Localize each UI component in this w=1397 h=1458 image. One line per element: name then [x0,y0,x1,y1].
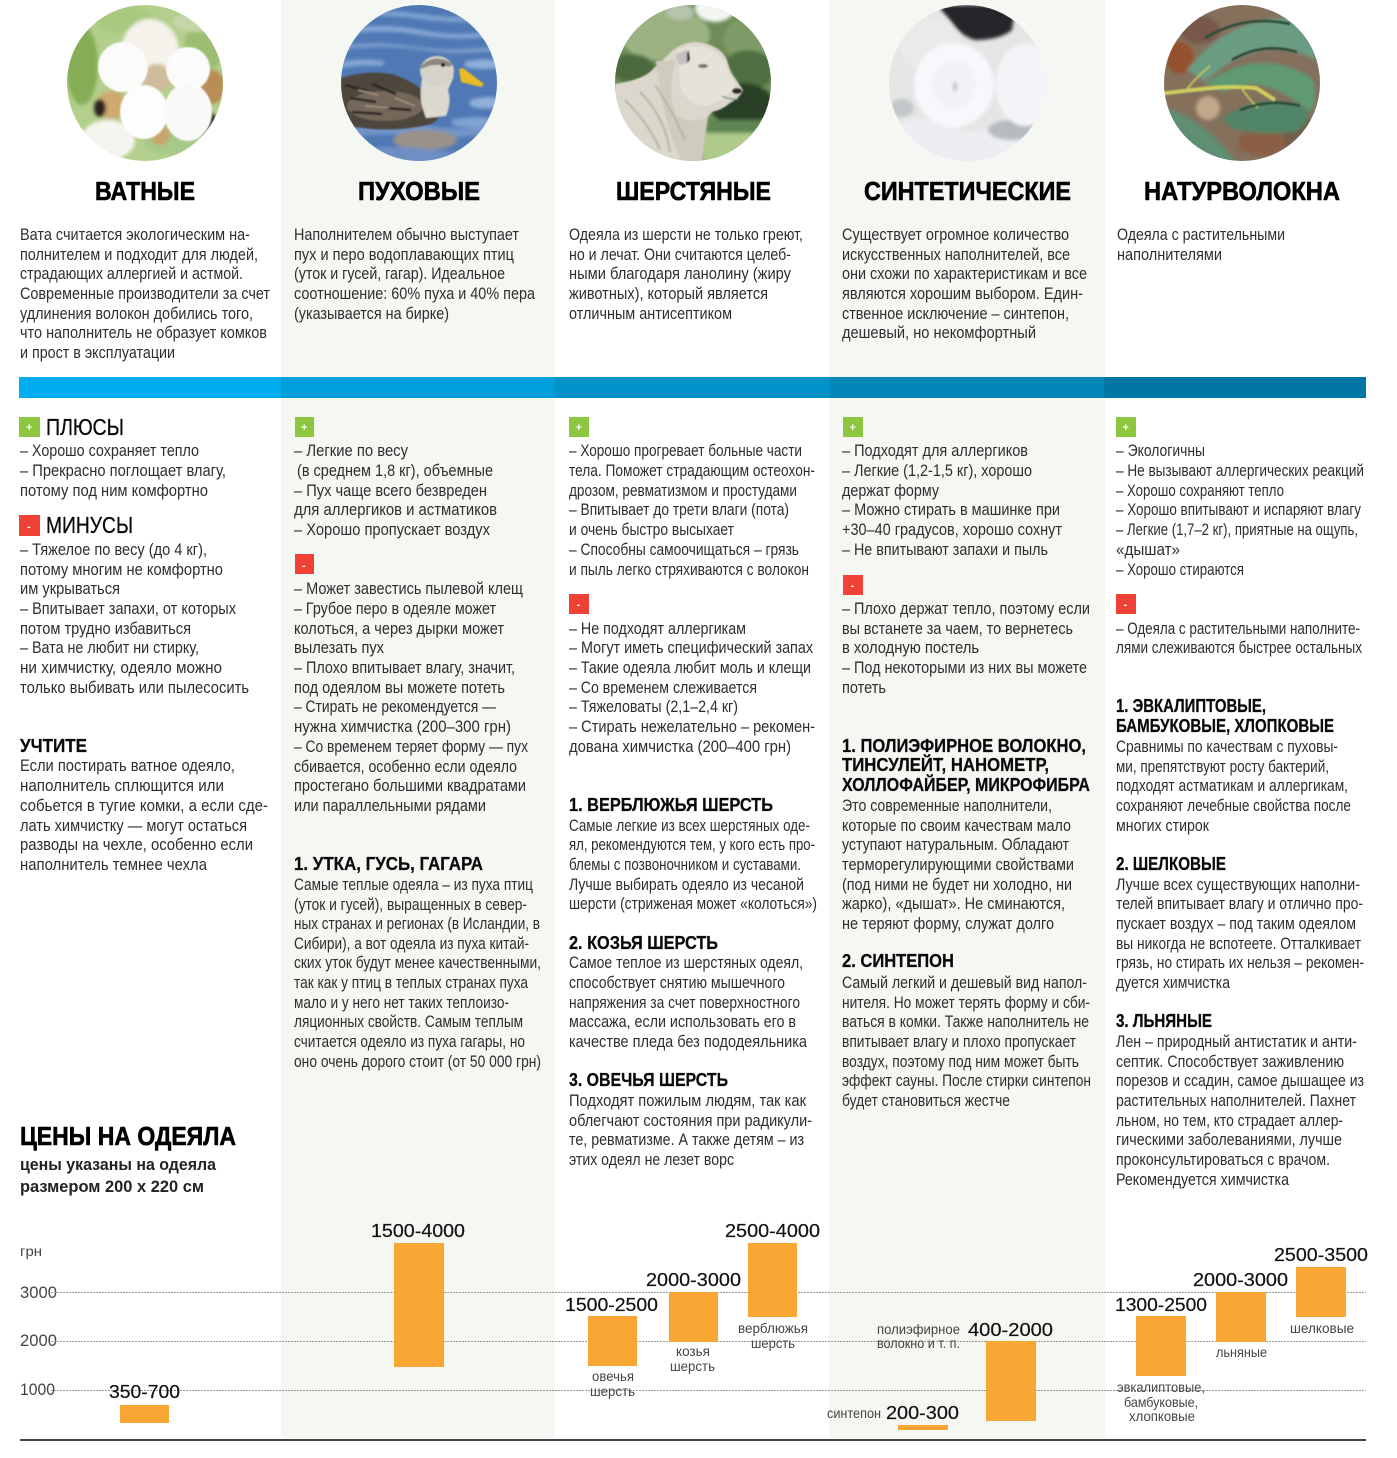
icon: duck photo [341,5,505,164]
intro text: удлинения волокон добились того, [20,305,253,323]
heading: ПУХОВЫЕ: ПУХОВЫЕ [358,178,480,206]
plus badge [1116,417,1136,437]
intro text: страдающих аллергией и астмой. [20,265,243,283]
type: duck, goose, loon: ских уток будут менее качественными, [294,954,541,972]
intro text [1117,226,1285,264]
type: polyester fibre: ХОЛЛОФАЙБЕР, МИКРОФИБРА [842,774,1090,795]
type: duck, goose, loon: считается одеяло из пуха гагары, но [294,1033,525,1051]
type: linen: растительных наполнителей. Пахнет [1116,1092,1356,1110]
type: silk: пускает воздух – под таким одеялом [1116,915,1356,933]
type: goat wool: способствует снятию мышечного [569,974,785,992]
type: linen: септик. Способствует заживлению [1116,1053,1344,1071]
note: УЧТИТЕ: наполнитель сплющится или [20,777,224,795]
intro text: ными благодаря ланолину (жиру [569,265,792,283]
pros list: – Легкие (1,2-1,5 кг), хорошо [842,462,1032,480]
blue divider band [19,377,1366,398]
pros list: (в среднем 1,8 кг), объемные [297,462,493,480]
intro text: что наполнитель не образует комков [20,324,267,342]
note: УЧТИТЕ [20,736,268,874]
cons list: под одеялом вы можете потеть [294,679,505,697]
type: sheep wool: те, ревматизме. А также детям – из [569,1131,804,1149]
minus badge and label: МИНУСЫ [46,512,133,538]
type: silk: телей впитывает влагу и отлично про- [1116,895,1363,913]
intro text: Одеяла с растительными [1117,226,1285,244]
pros list: – Хорошо прогревает больные части [569,442,802,460]
minus badge: - [576,599,580,611]
minus badge and label: - [27,521,31,533]
minus badge [295,554,314,574]
bar: sheep wool 1500-2500: шерсть [590,1383,635,1399]
bar: down 1500-4000: 1500-4000 [371,1220,465,1241]
type: silk: 2. ШЕЛКОВЫЕ [1116,854,1226,874]
type: camel wool: ял, рекомендуются тем, у кого есть про- [569,836,815,854]
intro text: пух и перо водоплавающих птиц [294,246,514,264]
type: linen: Лен – природный антистатик и анти- [1116,1033,1357,1051]
type: polyester fibre [842,736,1090,933]
type: goat wool: Самое теплое из шерстяных одеял, [569,954,803,972]
icon: cotton photo [66,5,225,161]
cons list: – Под некоторыми из них вы можете [842,659,1087,677]
plus badge and label [19,414,124,440]
cons list: потом трудно избавиться [20,620,191,638]
minus badge: - [1124,599,1128,611]
chart title: ЦЕНЫ НА ОДЕЯЛА [20,1123,236,1151]
intro text [569,226,803,323]
type: camel wool: блемы с позвоночником и суставами. [569,856,801,874]
type: sintepon: впитывает влагу и плохо пропускает [842,1033,1076,1051]
bar: silk 2500-3500: шелковые [1290,1320,1354,1336]
minus badge [843,575,863,595]
intro text: (уток и гусей, гагар). Идеальное [294,265,505,283]
type: goat wool: качестве пледа без пододеяльника [569,1033,808,1051]
heading: СИНТЕТИЧЕСКИЕ: СИНТЕТИЧЕСКИЕ [864,178,1071,206]
intro text: животных), который является [569,285,768,303]
pros list: потому под ним комфортно [20,482,208,500]
cons list: – Могут иметь специфический запах [569,639,813,657]
bar: camel wool 2500-4000 [725,1220,820,1351]
type: polyester fibre: которые по своим качествам мало [842,817,1071,835]
pros list: и очень быстро высыхает [569,521,734,539]
plus badge: + [850,422,856,434]
pros list: – Подходят для аллергиков [842,442,1028,460]
type: sheep wool: 3. ОВЕЧЬЯ ШЕРСТЬ [569,1070,728,1090]
pros list [842,442,1062,559]
type: polyester fibre: уступают натуральным. Обладают [842,836,1069,854]
type: eucalyptus, bamboo, cotton: многих стирок [1116,817,1210,835]
type: goat wool: 2. КОЗЬЯ ШЕРСТЬ [569,933,718,953]
minus badge [1116,594,1136,614]
type: eucalyptus, bamboo, cotton: БАМБУКОВЫЕ, ХЛОПКОВЫЕ [1116,716,1334,736]
note: УЧТИТЕ: разводы на чехле, особенно если [20,836,253,854]
type: eucalyptus, bamboo, cotton: ми, препятствуют росту бактерий, [1116,758,1329,776]
intro text: Современные производители за счет [20,285,270,303]
intro text: они схожи по характеристикам и все [842,265,1087,283]
plus badge and label: ПЛЮСЫ [46,414,124,440]
bar: sheep wool 1500-2500: овечья [592,1368,634,1384]
intro text: Вата считается экологическим на- [20,226,250,244]
cons list: – Не подходят аллергикам [569,620,746,638]
type: goat wool: массажа, если использовать его в [569,1013,796,1031]
cons list [569,620,815,756]
column 2: down blankets [294,5,541,1071]
type: sheep wool: облегчают состояния при радикули- [569,1112,812,1130]
pros list: – Хорошо стираются [1116,561,1244,579]
intro text [20,226,270,362]
pros list: – Пух чаще всего безвреден [294,482,487,500]
plus badge: + [576,422,582,434]
type: goat wool [569,933,808,1051]
type: camel wool [569,795,817,913]
bar: linen 2000-3000: 2000-3000 [1193,1269,1288,1290]
pros list: дрозом, ревматизмом и простудами [569,482,797,500]
intro text: Одеяла из шерсти не только греют, [569,226,803,244]
bar: linen 2000-3000 [1193,1269,1288,1360]
intro text: наполнителями [1117,246,1222,264]
plus badge and label: + [26,422,32,434]
cons list: – Такие одеяла любит моль и клещи [569,659,811,677]
type: duck, goose, loon: Сибири), а вот одеяла из пуха китай- [294,935,529,953]
type: camel wool: Самые легкие из всех шерстяных оде- [569,817,810,835]
column 3: wool blankets [569,0,817,1169]
chart title [20,1123,236,1196]
type: camel wool: шерсти (стриженая может «колоться») [569,895,817,913]
type: camel wool: Лучше выбирать одеяло из чесаной [569,876,804,894]
type: duck, goose, loon: Самые теплые одеяла – из пуха птиц [294,876,533,894]
type: eucalyptus, bamboo, cotton: сохраняют лечебные свойства после [1116,797,1351,815]
cons list: сбивается, особенно если одеяло [294,758,517,776]
intro text: дешевый, но некомфортный [842,324,1036,342]
cons list: простегано большими квадратами [294,777,526,795]
pros list: – Не впитывают запахи и пыль [842,541,1048,559]
cons list [294,580,528,815]
plus badge [569,417,589,437]
type: sintepon: ваться в комки. Также наполнитель не [842,1013,1089,1031]
pros list: тела. Поможет страдающим остеохон- [569,462,815,480]
note: УЧТИТЕ: Если постирать ватное одеяло, [20,757,235,775]
type: eucalyptus, bamboo, cotton: 1. ЭВКАЛИПТОВЫЕ, [1116,696,1266,716]
axis labels: 1000 [20,1380,55,1399]
bar: polyester 400-2000: волокно и т. п. [877,1335,960,1351]
column 4: synthetic blankets [842,5,1091,1110]
type: sintepon: эффект сауны. После стирки синтепон [842,1072,1091,1090]
column 5: natural fibre blankets [1116,5,1364,1189]
bar: cotton 350-700: 350-700 [109,1381,180,1402]
intro text: соотношение: 60% пуха и 40% пера [294,285,536,303]
intro text: являются хорошим выбором. Един- [842,285,1083,303]
cons list: нужна химчистка (200–300 грн) [294,718,511,736]
icon: eucalyptus photo [1159,5,1320,162]
minus badge: - [302,560,306,572]
pros list: – Можно стирать в машинке при [842,501,1060,519]
pros list: – Впитывает до трети влаги (пота) [569,501,789,519]
bar: sintepon 200-300: синтепон [827,1405,881,1421]
type: polyester fibre: 1. ПОЛИЭФИРНОЕ ВОЛОКНО, [842,736,1086,756]
bar: eucalyptus etc 1300-2500: хлопковые [1129,1408,1195,1424]
minus badge and label [19,512,133,538]
cons list: колоться, а через дырки может [294,620,504,638]
intro text: полнителем и подходит для людей, [20,246,258,264]
pros list [1116,442,1364,579]
type: linen: гическими заболеваниями, лучше [1116,1131,1342,1149]
intro text: отличным антисептиком [569,305,732,323]
column backgrounds [281,0,1105,1438]
axis labels: 3000 [20,1283,57,1302]
bar: polyester 400-2000: 400-2000 [968,1319,1053,1340]
column 1: cotton blankets [19,5,270,874]
intro text: Существует огромное количество [842,226,1069,244]
note: УЧТИТЕ: собьется в тугие комки, а если сде- [20,797,268,815]
type: duck, goose, loon: 1. УТКА, ГУСЬ, ГАГАРА [294,854,483,874]
cons list: – Со временем теряет форму — пух [294,738,528,756]
type: sintepon: будет становиться жестче [842,1092,1010,1110]
chart title: цены указаны на одеяла [20,1156,217,1174]
cons list: вылезать пух [294,639,384,657]
type: duck, goose, loon [294,854,541,1071]
price chart [20,1123,1368,1440]
type: sintepon: нителя. Но может терять форму и сби- [842,994,1090,1012]
type: silk: Лучше всех существующих наполни- [1116,876,1360,894]
cons list: – Стирать нежелательно – рекомен- [569,718,815,736]
bar: silk 2500-3500: 2500-3500 [1274,1244,1368,1265]
pros list: – Прекрасно поглощает влагу, [20,462,226,480]
bar: eucalyptus etc 1300-2500: бамбуковые, [1124,1394,1198,1410]
bar: silk 2500-3500 [1274,1244,1368,1336]
type: duck, goose, loon: ных странах и регионах (в Исландии, в [294,915,540,933]
type: linen: проконсультироваться с врачом. [1116,1151,1330,1169]
type: duck, goose, loon: (уток и гусей), выращенных в север- [294,896,527,914]
cons list: или параллельными рядами [294,797,486,815]
cons list [20,541,249,697]
heading: ШЕРСТЯНЫЕ: ШЕРСТЯНЫЕ [616,178,771,206]
pros list [20,442,226,500]
bar: sheep wool 1500-2500: 1500-2500 [565,1294,658,1315]
cons list: – Вата не любит ни стирку, [20,639,199,657]
type: sintepon [842,951,1091,1110]
icon: sheep photo [615,5,771,161]
type: sheep wool: Подходят пожилым людям, так как [569,1092,807,1110]
type: sintepon: воздух, поэтому под ним может быть [842,1053,1079,1071]
intro text: искусственных наполнителей, все [842,246,1070,264]
cons list: дована химчистка (200–400 грн) [569,738,791,756]
note: УЧТИТЕ: УЧТИТЕ [20,736,87,756]
type: linen [1116,1011,1364,1189]
note: УЧТИТЕ: наполнитель темнее чехла [20,856,208,874]
type: polyester fibre: ТИНСУЛЕЙТ, НАНОМЕТР, [842,754,1049,775]
axis labels: грн [20,1243,42,1259]
type: sintepon: Самый легкий и дешевый вид напол- [842,974,1087,992]
type: silk [1116,854,1364,992]
icon: synthetic fibre rolls photo [889,5,1036,161]
type: polyester fibre: не теряют форму, служат долго [842,915,1054,933]
type: polyester fibre: жарко), «дышат». Не сминаются, [842,895,1065,913]
type: duck, goose, loon: так как у птиц в теплых странах пуха [294,974,529,992]
type: goat wool: напряжения за счет поверхностного [569,994,800,1012]
bar: sintepon 200-300 [827,1402,959,1430]
type: sintepon: 2. СИНТЕПОН [842,951,954,971]
cons list: в холодную постель [842,639,979,657]
bar: sintepon 200-300: 200-300 [886,1402,959,1423]
heading: НАТУРВОЛОКНА: НАТУРВОЛОКНА [1144,178,1340,206]
cons list [1116,620,1362,657]
pros list [569,442,815,579]
bar: eucalyptus etc 1300-2500: эвкалиптовые, [1117,1379,1205,1395]
type: linen: Рекомендуется химчистка [1116,1171,1290,1189]
intro text [294,226,536,323]
plus badge: + [301,422,307,434]
cons list: – Впитывает запахи, от которых [20,600,236,618]
cons list: только выбивать или пылесосить [20,679,249,697]
intro text: но и лечат. Они считаются целеб- [569,246,791,264]
intro text: и прост в эксплуатации [20,344,175,362]
pros list: +30–40 градусов, хорошо сохнут [842,521,1062,539]
cons list: – Плохо держат тепло, поэтому если [842,600,1090,618]
bar: goat wool 2000-3000: козья [676,1343,710,1359]
bar: camel wool 2500-4000: шерсть [751,1335,795,1351]
type: polyester fibre: Это современные наполнители, [842,797,1052,815]
type: eucalyptus, bamboo, cotton [1116,696,1351,835]
bar: linen 2000-3000: льняные [1216,1344,1267,1360]
bar: polyester 400-2000 [877,1319,1053,1421]
bar: goat wool 2000-3000: 2000-3000 [646,1269,741,1290]
type: sheep wool [569,1070,812,1169]
bar: eucalyptus etc 1300-2500: 1300-2500 [1115,1294,1207,1315]
intro text: ственное исключение – синтепон, [842,305,1069,323]
intro text [842,226,1087,342]
cons list: – Грубое перо в одеяле может [294,600,496,618]
type: silk: дуется химчистка [1116,974,1231,992]
pros list: держат форму [842,482,940,500]
bar: eucalyptus etc 1300-2500 [1115,1294,1207,1424]
cons list: – Плохо впитывает влагу, значит, [294,659,515,677]
cons list: им укрываться [20,580,120,598]
intro text: Наполнителем обычно выступает [294,226,519,244]
bar: sheep wool 1500-2500 [565,1294,658,1399]
pros list [294,442,497,539]
pros list: – Легкие по весу [294,442,409,460]
type: eucalyptus, bamboo, cotton: подходят астматикам и аллергикам, [1116,777,1348,795]
type: linen: 3. ЛЬНЯНЫЕ [1116,1011,1212,1031]
bar: camel wool 2500-4000: 2500-4000 [725,1220,820,1241]
pros list: – Хорошо пропускает воздух [294,521,490,539]
pros list: «дышат» [1116,541,1180,559]
bar: camel wool 2500-4000: верблюжья [738,1320,808,1336]
type: linen: порезов и ссадин, самое дышащее из [1116,1072,1364,1090]
cons list: ни химчистку, одеяло можно [20,659,222,677]
heading: ВАТНЫЕ: ВАТНЫЕ [95,178,195,206]
pros list: – Экологичны [1116,442,1205,460]
plus badge [295,417,314,437]
pros list: для аллергиков и астматиков [294,501,497,519]
type: linen: льном, но тем, кто страдает аллер- [1116,1112,1343,1130]
plus badge [843,417,863,437]
bar: cotton 350-700 [109,1381,180,1423]
pros list: – Способны самоочищаться – грязь [569,541,799,559]
type: camel wool: 1. ВЕРБЛЮЖЬЯ ШЕРСТЬ [569,795,773,815]
cons list: – Тяжеловаты (2,1–2,4 кг) [569,698,738,716]
cons list: потому многим не комфортно [20,561,223,579]
type: duck, goose, loon: ляционных свойств. Самым теплым [294,1013,523,1031]
intro text: (указывается на бирке) [294,305,449,323]
cons list: потеть [842,679,886,697]
type: eucalyptus, bamboo, cotton: Сравнимы по качествам с пуховы- [1116,738,1338,756]
type: polyester fibre: (под ними не будет ни холодно, ни [842,876,1072,894]
type: sheep wool: этих одеял не лезет ворс [569,1151,734,1169]
bar: down 1500-4000 [371,1220,465,1367]
note: УЧТИТЕ: лать химчистку — могут остаться [20,817,247,835]
axis labels: 2000 [20,1331,57,1350]
type: polyester fibre: терморегулирующими свойствами [842,856,1074,874]
cons list: – Со временем слеживается [569,679,757,697]
cons list: – Тяжелое по весу (до 4 кг), [20,541,207,559]
cons list: вы встанете за чаем, то вернетесь [842,620,1073,638]
minus badge [569,594,589,614]
plus badge: + [1122,422,1129,434]
type: duck, goose, loon: оно очень дорого стоит (от 50 000 грн) [294,1053,541,1071]
chart title: размером 200 х 220 см [20,1178,204,1196]
cons list [842,600,1090,697]
axis labels [20,1243,57,1399]
cons list: – Стирать не рекомендуется — [294,698,497,716]
minus badge: - [850,580,854,592]
pros list: – Хорошо сохраняет тепло [20,442,199,460]
pros list: – Хорошо сохраняют тепло [1116,482,1284,500]
bar: polyester 400-2000: полиэфирное [877,1321,960,1337]
bar: goat wool 2000-3000 [646,1269,741,1374]
bar: goat wool 2000-3000: шерсть [670,1358,715,1374]
type: duck, goose, loon: мало и у него нет таких теплоизо- [294,994,509,1012]
cons list: – Может завестись пылевой клещ [294,580,524,598]
pros list: и пыль легко стряхиваются с волокон [569,561,809,579]
